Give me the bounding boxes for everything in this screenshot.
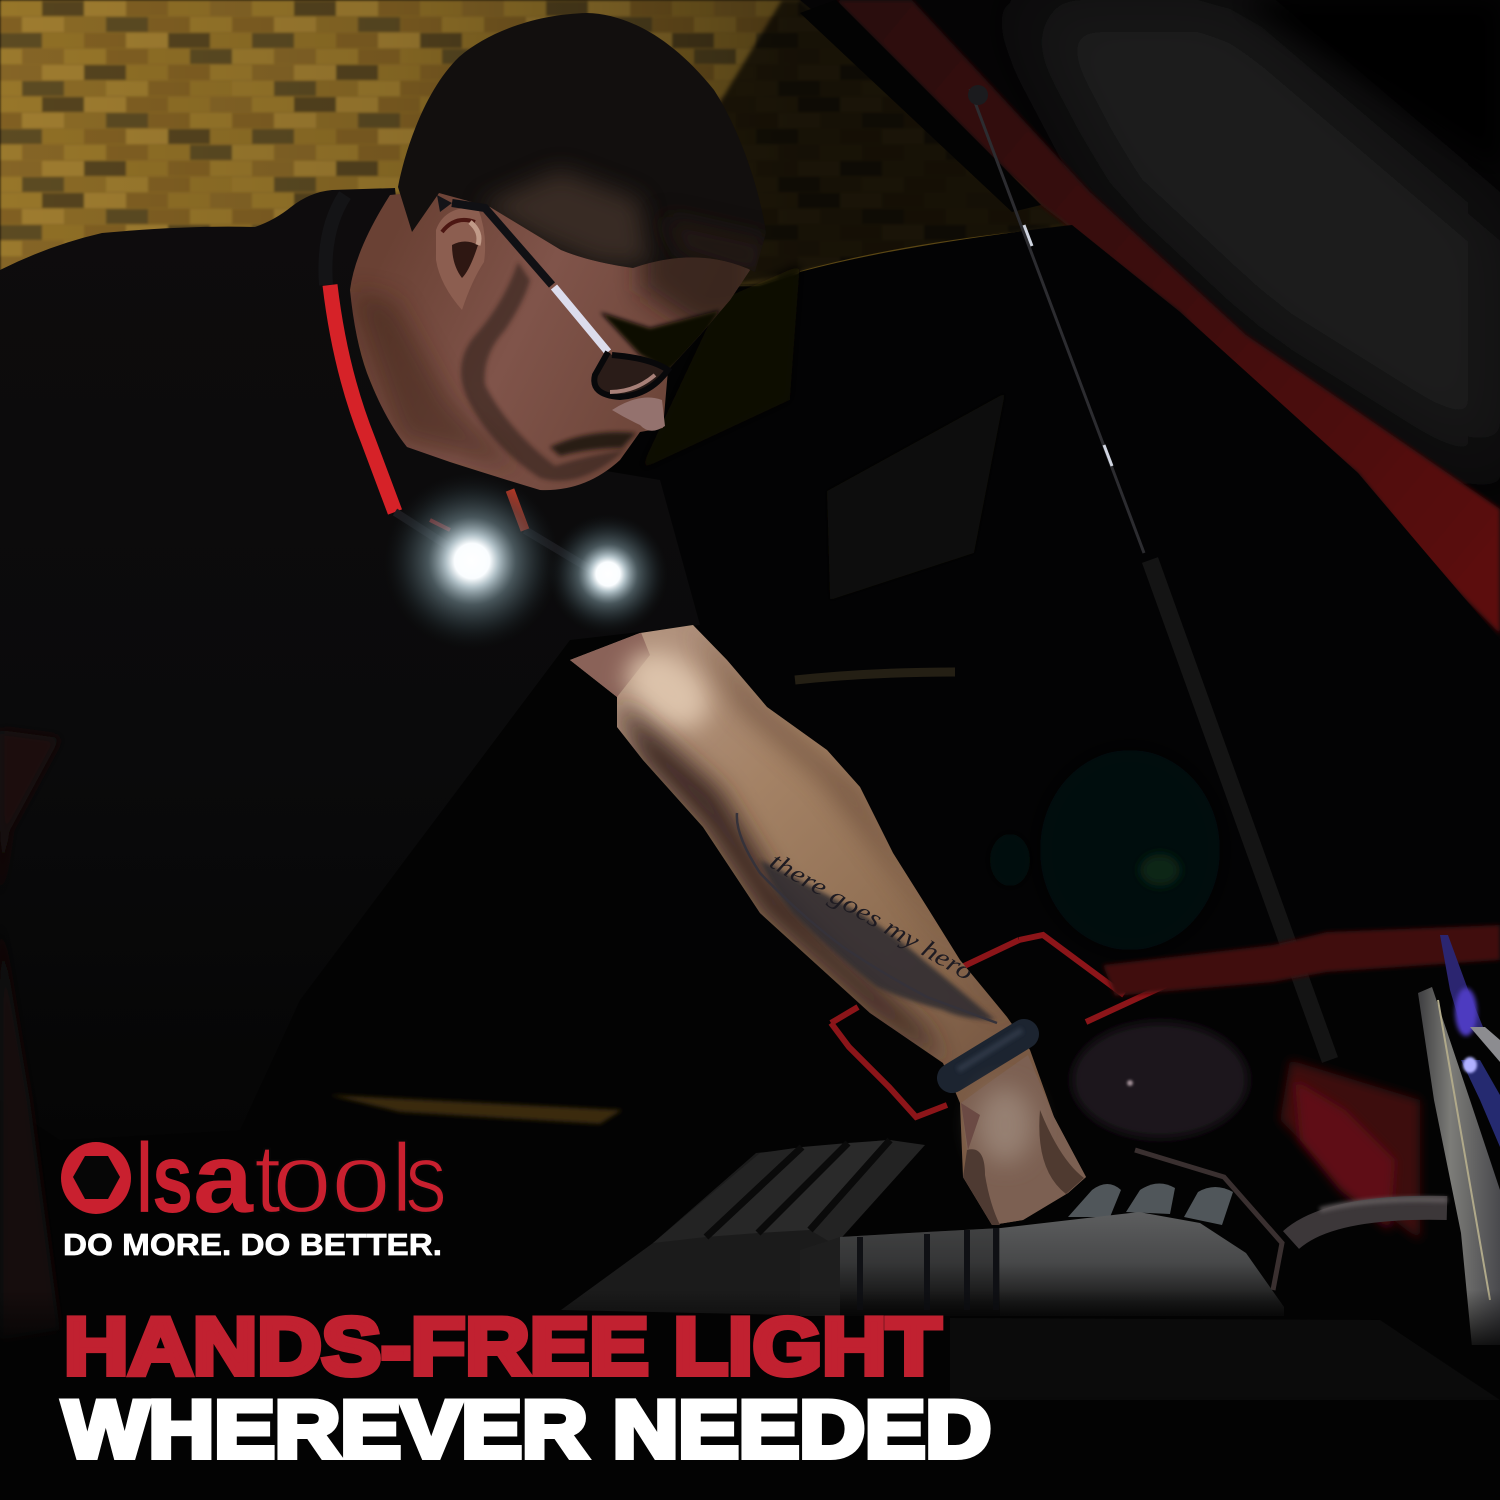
wristband xyxy=(952,1030,1024,1078)
neck shadow xyxy=(350,290,520,470)
hood strut xyxy=(968,85,1330,1060)
logo light letters: l xyxy=(391,1123,413,1233)
headline line 1: HANDS-FREE LIGHT xyxy=(64,1302,941,1392)
lower edge shade xyxy=(617,700,943,1063)
car hood xyxy=(800,0,1500,640)
gold reflection strip xyxy=(330,1095,622,1124)
LED light right xyxy=(548,514,668,634)
tattoo feather xyxy=(737,813,997,1023)
arm with tattoo xyxy=(565,625,1086,1225)
logo hexagon O: O xyxy=(61,1126,131,1233)
logo bold letters: s xyxy=(152,1123,193,1233)
man: neck and face xyxy=(350,190,760,490)
logo light letters xyxy=(254,1123,447,1233)
man: hair xyxy=(398,13,770,280)
logo bold letters xyxy=(137,1123,255,1233)
moustache xyxy=(550,432,636,456)
man: shirt and torso xyxy=(0,188,700,1340)
coolant reservoir xyxy=(1072,1022,1248,1138)
red engine parts right xyxy=(1280,1060,1420,1240)
logo light letters: o xyxy=(331,1123,391,1233)
red neck light band xyxy=(325,195,600,575)
logo bold letters: a xyxy=(193,1123,255,1233)
intake manifold runners xyxy=(1068,1183,1233,1225)
eye shadow xyxy=(600,310,720,372)
silver belt strip xyxy=(1418,935,1500,1380)
glasses xyxy=(437,195,668,397)
tagline: DO MORE. DO BETTER. xyxy=(63,1227,442,1262)
LED light left xyxy=(384,473,560,649)
brick wall xyxy=(0,0,1072,285)
metal bracket xyxy=(1135,1150,1282,1290)
sideburn and beard xyxy=(461,262,625,481)
logo light letters: t xyxy=(254,1123,281,1233)
engine cover ribs xyxy=(561,1140,925,1316)
headline line 2: WHEREVER NEEDED xyxy=(63,1385,991,1475)
red hood edge xyxy=(836,0,1500,634)
logo bold letters: l xyxy=(137,1123,152,1233)
tattoo script: there goes my hero xyxy=(765,848,978,986)
engine bay frame, red xyxy=(831,935,1166,1117)
highlight xyxy=(614,639,719,738)
fade to black at bottom xyxy=(0,1290,1500,1350)
red bar behind engine xyxy=(1103,925,1500,996)
forehead shadow xyxy=(628,257,750,322)
elbow pink patch xyxy=(565,630,650,697)
logo xyxy=(61,1123,447,1262)
nose xyxy=(612,398,665,431)
metal hose right xyxy=(1291,1199,1447,1240)
ear xyxy=(436,208,485,310)
logo light letters: s xyxy=(405,1123,447,1233)
logo light letters: o xyxy=(272,1123,332,1233)
car roof and windshield xyxy=(640,225,1500,960)
intake pipe xyxy=(800,1212,1284,1316)
hand xyxy=(961,1055,1086,1225)
